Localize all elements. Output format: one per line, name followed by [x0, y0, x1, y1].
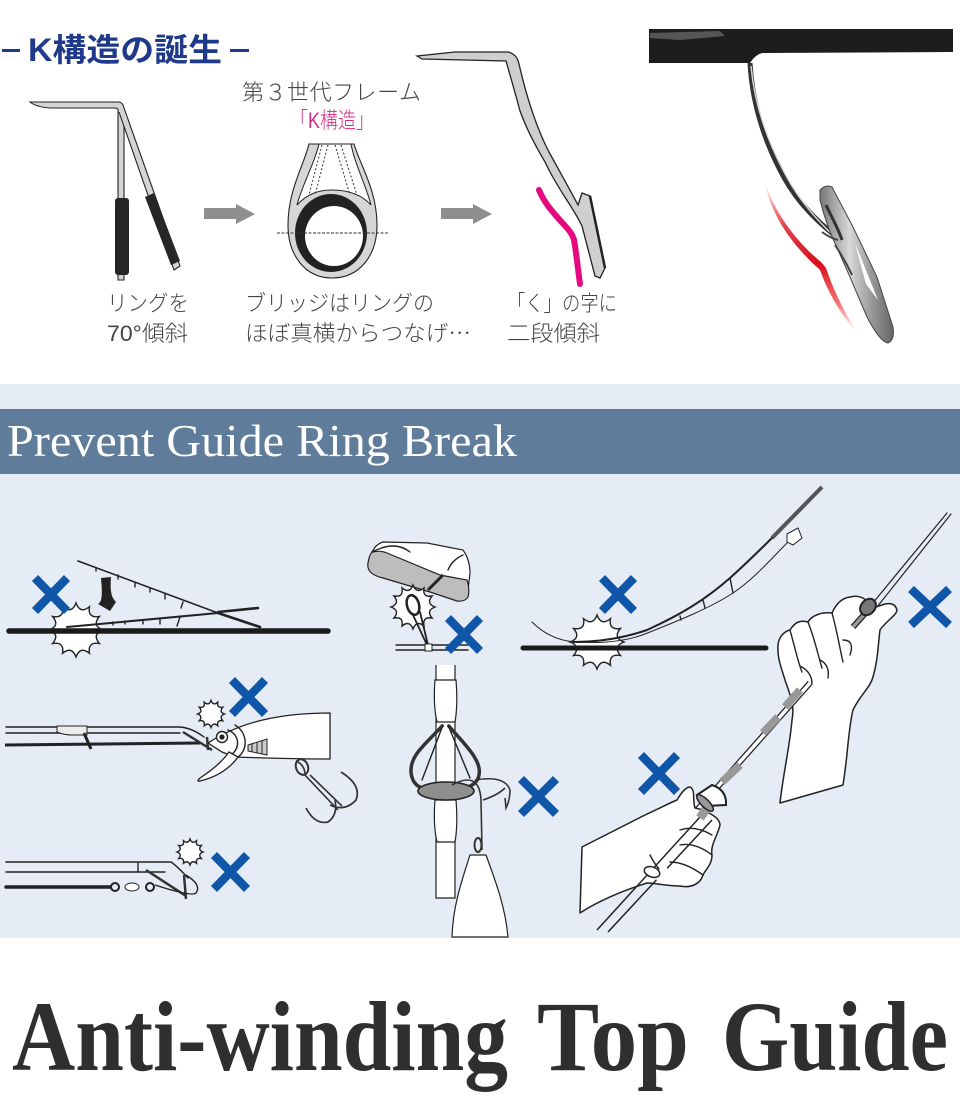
scene: foot stepping on guide [368, 542, 470, 651]
label: two-stage tilt in ku shape: 二段傾斜 [507, 321, 600, 346]
mark: X icons [35, 578, 949, 889]
label: two-stage tilt in ku shape: 「く」の字に [507, 291, 617, 316]
scene: lure pulled into guide [5, 700, 357, 822]
panel: prevent guide ring break [0, 384, 960, 938]
section banner: Prevent Guide Ring Break [7, 415, 517, 466]
scene: hand holding mid guide [580, 785, 726, 932]
label: bridge connects from ring sides: ほぼ真横からつなげ… [245, 316, 471, 348]
label: ring tilted 70 degrees: リングを [107, 291, 189, 316]
scene: hand holding top guide [697, 513, 951, 810]
heading: K構造の誕生: K構造の誕生 [28, 32, 222, 68]
title: Anti-winding Top Guide: Top [537, 981, 689, 1092]
diagram: front view of K frame and ring [277, 144, 388, 278]
panel: K structure diagram [2, 32, 617, 348]
scene: hook caught in guide with sinker [411, 665, 510, 937]
label: two-stage tilt in ku shape [507, 291, 617, 346]
title: Anti-winding Top Guide: Anti-winding [12, 981, 508, 1092]
label: third generation frame: 第３世代フレーム [242, 80, 421, 105]
scene: rod dropped on ground [9, 561, 328, 657]
title: Anti-winding Top Guide [12, 981, 948, 1092]
label: ring tilted 70 degrees [107, 291, 189, 346]
label: K structure: 「K構造」 [290, 108, 374, 133]
label: bridge connects from ring sides [245, 291, 471, 348]
photo: guide on rod [649, 29, 953, 343]
label: ring tilted 70 degrees: 70°傾斜 [107, 321, 188, 346]
arrow [204, 204, 255, 224]
arrow [441, 204, 492, 224]
diagram: side view with two-stage tilt [417, 52, 605, 284]
scene: rod tip pressed to ground [523, 487, 822, 669]
scene: swivel pulled into top guide [6, 839, 203, 899]
section banner [0, 409, 960, 474]
label: bridge connects from ring sides: ブリッジはリングの [245, 291, 434, 316]
diagram: 70 degree tilted guide [30, 102, 180, 280]
